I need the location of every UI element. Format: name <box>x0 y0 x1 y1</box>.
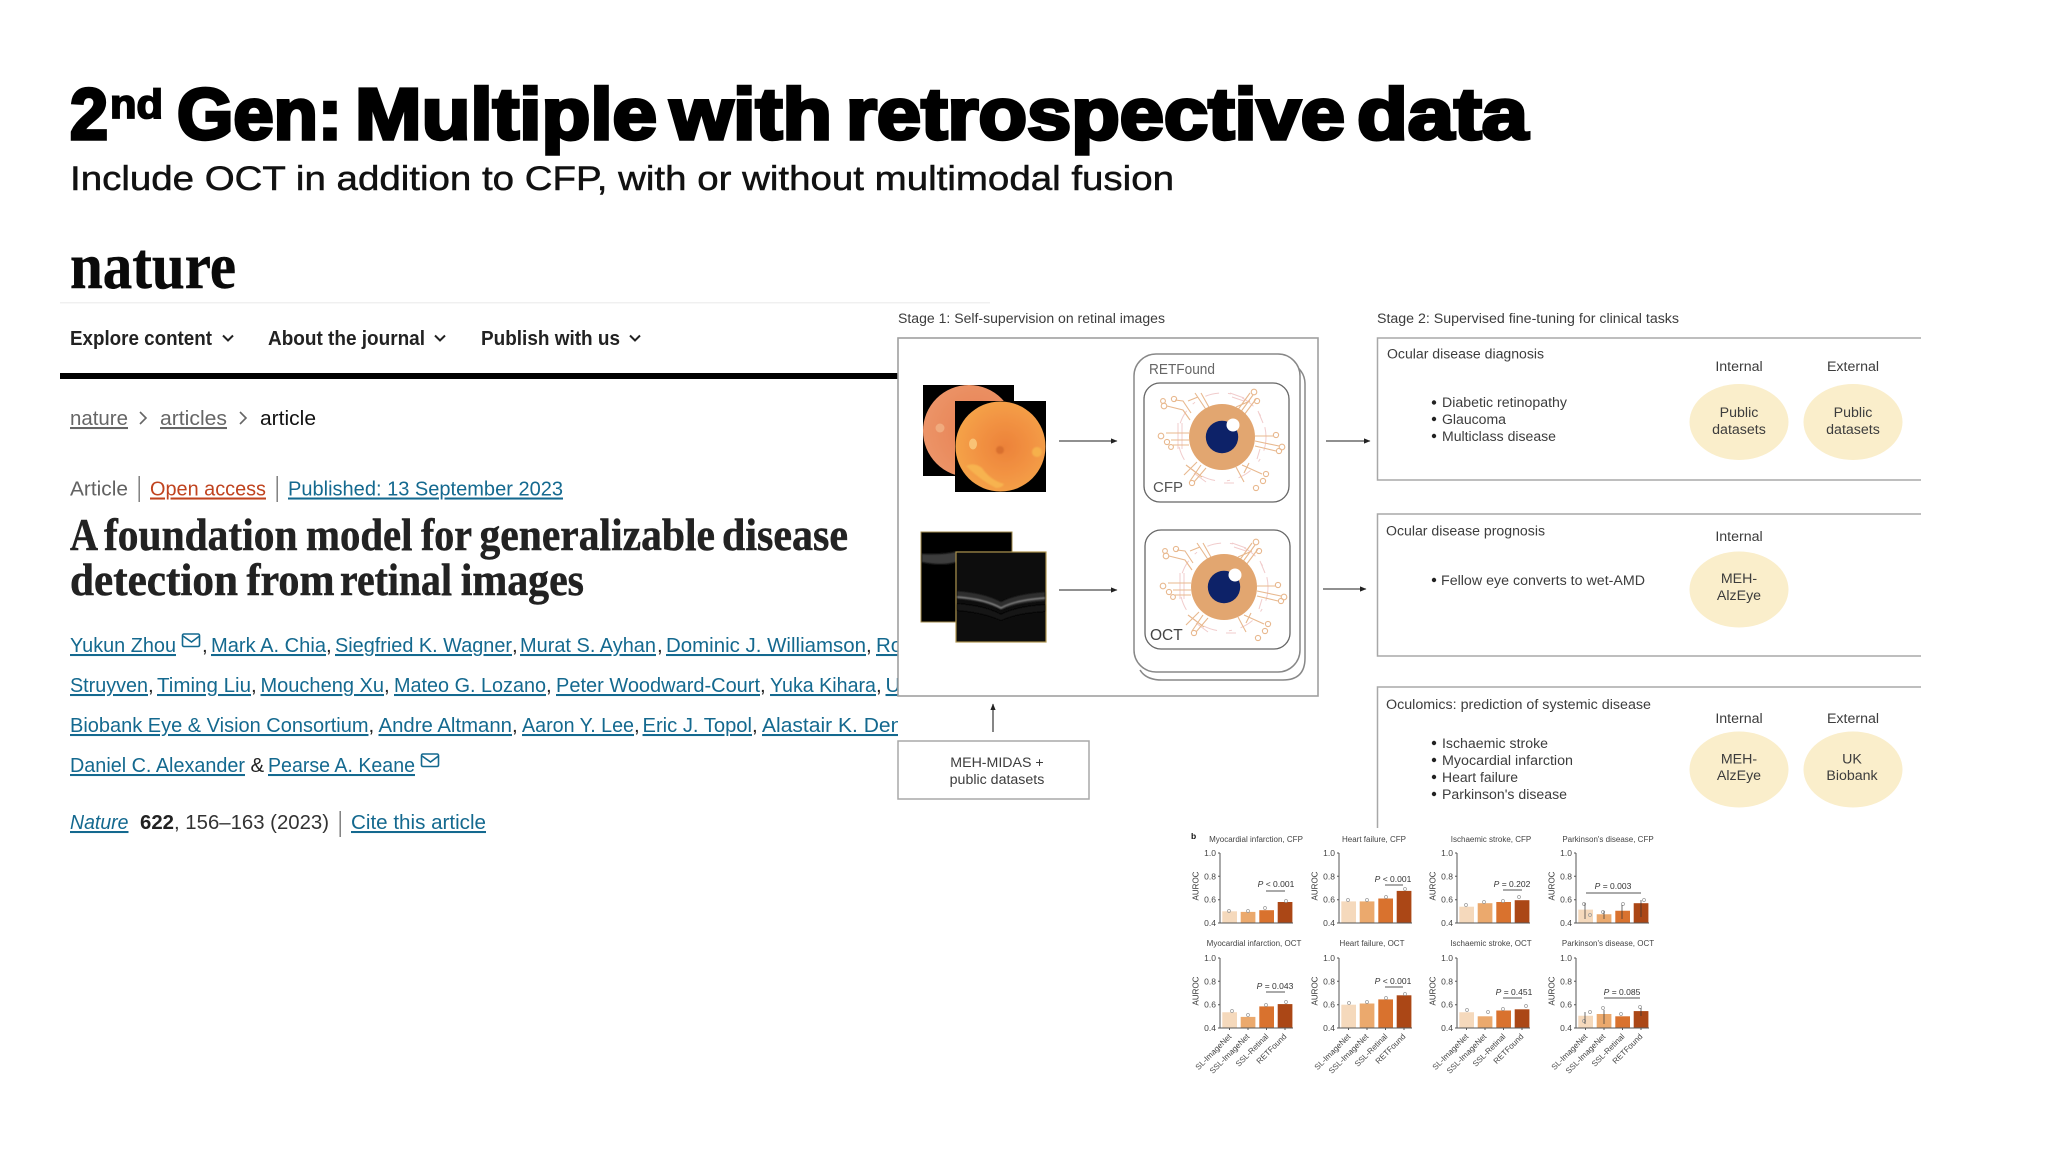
OCT encoder <box>1145 530 1290 649</box>
author list: Peter Woodward-Court <box>556 674 760 697</box>
RETFound model stack: RETFound <box>1149 361 1215 378</box>
chart: ischaemic stroke CFP: Ischaemic stroke, CFP <box>1451 835 1531 844</box>
panel letter: b <box>1191 831 1196 841</box>
chart: heart failure OCT: SL-ImageNet <box>1313 1032 1353 1072</box>
CFP encoder <box>1144 383 1289 502</box>
chart: Parkinson's disease CFP: 0.4 <box>1560 918 1572 928</box>
author list: Pearse A. Keane <box>268 754 415 777</box>
author list: , <box>760 674 766 697</box>
panel: oculomics: Myocardial infarction <box>1442 753 1573 769</box>
panel: ocular disease diagnosis: datasets <box>1712 422 1766 438</box>
nature logo: nature <box>70 230 236 303</box>
chart: myocardial infarction OCT: 0.8 <box>1204 976 1216 986</box>
panel: oculomics: Heart failure <box>1442 770 1518 786</box>
chart: myocardial infarction OCT: 0.4 <box>1204 1023 1216 1033</box>
chart: Parkinson's disease OCT: 0.8 <box>1560 976 1572 986</box>
author list: Daniel C. Alexander <box>70 754 245 777</box>
navigation bar: About the journal <box>268 327 425 350</box>
chart: heart failure OCT: 0.6 <box>1323 1000 1335 1010</box>
chart: ischaemic stroke OCT: P = 0.451 <box>1496 987 1533 997</box>
author list: , <box>546 674 552 697</box>
chart: ischaemic stroke OCT: AUROC <box>1428 976 1438 1005</box>
author list: Siegfried K. Wagner <box>335 634 512 657</box>
title: Gen: <box>177 75 342 155</box>
author list: Mark A. Chia <box>211 634 327 657</box>
dataset box: MEH-MIDAS: public datasets <box>950 772 1044 788</box>
chart: heart failure CFP: AUROC <box>1310 871 1320 900</box>
citation line: Cite this article <box>351 811 486 834</box>
article heading <box>70 510 848 605</box>
chart: myocardial infarction OCT: SL-ImageNet <box>1194 1032 1234 1072</box>
chart: myocardial infarction CFP: 0.6 <box>1204 895 1216 905</box>
chart: heart failure CFP: 1.0 <box>1323 848 1335 858</box>
citation line: Nature <box>70 811 128 834</box>
author list: Struyven <box>70 674 148 697</box>
breadcrumb <box>70 407 316 430</box>
panel: oculomics: UK <box>1842 752 1862 768</box>
chart: ischaemic stroke CFP <box>1428 835 1531 928</box>
author list: Yuka Kihara <box>770 674 877 697</box>
image stack: OCT scans <box>921 532 1046 642</box>
chart: heart failure CFP: 0.4 <box>1323 918 1335 928</box>
chart: ischaemic stroke CFP: 0.4 <box>1441 918 1453 928</box>
author list: Alastair K. Denn <box>762 714 914 737</box>
chart: myocardial infarction OCT <box>1192 939 1301 1076</box>
panel: oculomics: Parkinson's disease <box>1442 787 1567 803</box>
chart: ischaemic stroke OCT: SL-ImageNet <box>1431 1032 1471 1072</box>
chart: Parkinson's disease OCT: Parkinson's disease, OCT <box>1562 939 1654 948</box>
chart: heart failure OCT: SSL-Retinal <box>1353 1032 1390 1069</box>
chart: Parkinson's disease OCT: SSL-Retinal <box>1590 1032 1627 1069</box>
panel: ocular disease prognosis: Internal <box>1715 529 1763 545</box>
article meta row: Published: 13 September 2023 <box>288 478 563 500</box>
chart: Parkinson's disease OCT: 0.6 <box>1560 1000 1572 1010</box>
citation line <box>70 811 486 837</box>
author list: , <box>512 634 518 657</box>
navigation bar: Explore content <box>70 327 212 350</box>
panel: oculomics: Ischaemic stroke <box>1442 736 1548 752</box>
chart: Parkinson's disease OCT: P = 0.085 <box>1604 987 1641 997</box>
breadcrumb: nature <box>70 407 128 430</box>
panel: ocular disease diagnosis: Internal <box>1715 359 1763 375</box>
author list <box>70 634 914 777</box>
arrow: OCT to encoder <box>1059 589 1117 591</box>
chart: myocardial infarction CFP: 0.4 <box>1204 918 1216 928</box>
chart: ischaemic stroke OCT: 0.6 <box>1441 1000 1453 1010</box>
stage 1 heading: Stage 1: Self-supervision on retinal images <box>898 311 1165 327</box>
article heading: foundation <box>104 510 298 560</box>
breadcrumb: articles <box>160 407 227 430</box>
article heading: generalizable <box>480 510 715 560</box>
title: retrospective <box>846 75 1345 155</box>
chart: myocardial infarction CFP: Myocardial infarction, CFP <box>1209 835 1303 844</box>
panel: oculomics <box>1378 687 1921 828</box>
panel: oculomics: External <box>1827 711 1879 727</box>
chart: Parkinson's disease OCT <box>1548 939 1654 1076</box>
article heading: model <box>306 510 412 560</box>
article heading: retinal <box>340 555 452 605</box>
chart: heart failure OCT: 1.0 <box>1323 953 1335 963</box>
chart: ischaemic stroke OCT: Ischaemic stroke, OCT <box>1450 939 1532 948</box>
author list: Yukun Zhou <box>70 634 176 657</box>
chart: heart failure CFP: Heart failure, CFP <box>1342 835 1406 844</box>
chart: Parkinson's disease CFP: AUROC <box>1548 871 1556 900</box>
chart: myocardial infarction CFP: P < 0.001 <box>1258 879 1295 889</box>
author list: , <box>148 674 154 697</box>
chart: heart failure OCT: 0.8 <box>1323 976 1335 986</box>
chart: myocardial infarction OCT: AUROC <box>1192 976 1200 1005</box>
author list: Mateo G. Lozano <box>394 674 546 697</box>
dataset box: MEH-MIDAS <box>898 741 1089 799</box>
panel: ocular disease diagnosis: Ocular disease diagnosis <box>1387 346 1544 362</box>
arrow: stage 1 to diagnosis <box>1326 440 1370 442</box>
author list: Eric J. Topol <box>642 714 752 737</box>
nav rule <box>60 373 898 379</box>
chart: ischaemic stroke OCT: 1.0 <box>1441 953 1453 963</box>
citation line: 622 <box>140 811 174 834</box>
panel: oculomics: Internal <box>1715 711 1763 727</box>
chart: Parkinson's disease OCT: SL-ImageNet <box>1550 1032 1590 1072</box>
RETFound model stack <box>1134 354 1305 680</box>
chart: ischaemic stroke OCT: RETFound <box>1492 1032 1525 1066</box>
chart: heart failure OCT: SSL-ImageNet <box>1327 1032 1371 1076</box>
breadcrumb: article <box>260 407 316 430</box>
author list: , <box>752 714 758 737</box>
chart: heart failure CFP <box>1310 835 1412 928</box>
chart: Parkinson's disease OCT: AUROC <box>1548 976 1556 1005</box>
chart: Parkinson's disease CFP: P = 0.003 <box>1595 881 1632 891</box>
author list: U <box>886 674 900 697</box>
panel: oculomics: Oculomics: prediction of systemic disease <box>1386 697 1651 713</box>
title <box>70 75 1529 155</box>
author list: Biobank Eye & Vision Consortium <box>70 714 368 737</box>
chart: heart failure OCT: Heart failure, OCT <box>1340 939 1405 948</box>
panel: ocular disease diagnosis: Diabetic retinopathy <box>1442 395 1568 411</box>
chart: Parkinson's disease OCT: 0.4 <box>1560 1023 1572 1033</box>
article heading: A <box>70 510 98 560</box>
chart: ischaemic stroke OCT: 0.8 <box>1441 976 1453 986</box>
author list: , <box>657 634 663 657</box>
author list: Moucheng Xu <box>260 674 384 697</box>
chart: myocardial infarction OCT: SSL-ImageNet <box>1208 1032 1252 1076</box>
chart: ischaemic stroke CFP: 0.8 <box>1441 871 1453 881</box>
author list: , <box>384 674 390 697</box>
chart: ischaemic stroke OCT <box>1428 939 1533 1076</box>
chart: ischaemic stroke CFP: 1.0 <box>1441 848 1453 858</box>
author list: & <box>250 754 264 777</box>
article heading: detection <box>70 555 238 605</box>
chart: myocardial infarction OCT: P = 0.043 <box>1257 981 1294 991</box>
chart: ischaemic stroke CFP: AUROC <box>1428 871 1438 900</box>
author list: , <box>326 634 332 657</box>
arrow: stage 1 to prognosis <box>1323 588 1366 590</box>
panel: stage 1 self-supervision <box>898 311 1318 696</box>
image stack: colour fundus photographs <box>923 385 1046 492</box>
navigation bar <box>70 327 640 350</box>
chart: myocardial infarction OCT: 1.0 <box>1204 953 1216 963</box>
panel: oculomics: Biobank <box>1826 768 1879 784</box>
chart: ischaemic stroke OCT: 0.4 <box>1441 1023 1453 1033</box>
article heading: for <box>421 510 472 560</box>
panel: ocular disease diagnosis: datasets <box>1826 422 1880 438</box>
panel: ocular disease diagnosis <box>1378 338 1921 480</box>
panel: ocular disease prognosis: Ocular disease prognosis <box>1386 524 1545 540</box>
article meta row: Open access <box>150 478 266 500</box>
panel: ocular disease diagnosis: Public <box>1720 405 1758 421</box>
CFP encoder: CFP <box>1153 479 1183 496</box>
author list: , <box>202 634 208 657</box>
panel: stage 2 supervised fine-tuning <box>1377 311 1921 828</box>
chart: myocardial infarction OCT: RETFound <box>1255 1032 1288 1066</box>
chart: ischaemic stroke OCT: SSL-ImageNet <box>1445 1032 1489 1076</box>
chart: heart failure CFP: 0.8 <box>1323 871 1335 881</box>
chart: myocardial infarction OCT: SSL-Retinal <box>1234 1032 1271 1069</box>
subtitle: Include OCT in addition to CFP, with or without multimodal fusion <box>70 160 1174 198</box>
chart: Parkinson's disease CFP: 0.8 <box>1560 871 1572 881</box>
chart: heart failure OCT: 0.4 <box>1323 1023 1335 1033</box>
title: Multiple <box>355 75 657 155</box>
chart: myocardial infarction OCT: 0.6 <box>1204 1000 1216 1010</box>
chart: ischaemic stroke OCT: SSL-Retinal <box>1471 1032 1508 1069</box>
chart: myocardial infarction OCT: Myocardial infarction, OCT <box>1207 939 1301 948</box>
chart: Parkinson's disease OCT: 1.0 <box>1560 953 1572 963</box>
chart: heart failure OCT <box>1310 939 1412 1076</box>
chart: Parkinson's disease OCT: SSL-ImageNet <box>1564 1032 1608 1076</box>
title: 2 <box>70 75 108 155</box>
panel: ocular disease diagnosis: Multiclass disease <box>1442 429 1556 445</box>
article heading: from <box>246 555 334 605</box>
article meta row: Article <box>70 478 128 500</box>
navigation bar: Publish with us <box>481 327 620 350</box>
author list: Murat S. Ayhan <box>520 634 656 657</box>
panel: ocular disease prognosis: Fellow eye converts to wet-AMD <box>1441 573 1645 589</box>
chart: ischaemic stroke CFP: 0.6 <box>1441 895 1453 905</box>
panel: ocular disease prognosis: MEH- <box>1721 571 1757 587</box>
panel: AUROC bar charts <box>1191 831 1654 1076</box>
chart: heart failure OCT: AUROC <box>1310 976 1320 1005</box>
author list: , <box>876 674 882 697</box>
article heading: disease <box>722 510 848 560</box>
chart: Parkinson's disease CFP: 0.6 <box>1560 895 1572 905</box>
chart: Parkinson's disease CFP: Parkinson's disease, CFP <box>1562 835 1654 844</box>
chart: myocardial infarction CFP: 1.0 <box>1204 848 1216 858</box>
title: with <box>669 75 832 155</box>
author list: Timing Liu <box>157 674 251 697</box>
panel: oculomics: AlzEye <box>1717 768 1761 784</box>
author list: Dominic J. Williamson <box>666 634 866 657</box>
title: nd <box>110 81 163 127</box>
chart: Parkinson's disease CFP <box>1548 835 1654 928</box>
arrow: datasets to stage 1 <box>992 704 994 732</box>
chart: heart failure OCT: RETFound <box>1374 1032 1407 1066</box>
chart: heart failure OCT: P < 0.001 <box>1375 976 1412 986</box>
panel: ocular disease prognosis: AlzEye <box>1717 588 1761 604</box>
chart: heart failure CFP: 0.6 <box>1323 895 1335 905</box>
author list: Aaron Y. Lee <box>522 714 634 737</box>
author list: , <box>251 674 257 697</box>
author list: Ro <box>876 634 902 657</box>
panel: ocular disease prognosis <box>1378 514 1921 656</box>
panel: ocular disease diagnosis: Glaucoma <box>1442 412 1506 428</box>
author list: , <box>512 714 518 737</box>
author list: Andre Altmann <box>378 714 512 737</box>
arrow: CFP to encoder <box>1059 440 1117 442</box>
panel: ocular disease diagnosis: Public <box>1834 405 1872 421</box>
panel: ocular disease diagnosis: External <box>1827 359 1879 375</box>
stage 1 box <box>898 338 1318 696</box>
chart: heart failure CFP: P < 0.001 <box>1375 874 1412 884</box>
chart: myocardial infarction CFP: AUROC <box>1192 871 1200 900</box>
author list: , <box>634 714 640 737</box>
chart: Parkinson's disease CFP: 1.0 <box>1560 848 1572 858</box>
chart: myocardial infarction CFP: 0.8 <box>1204 871 1216 881</box>
panel: oculomics: MEH- <box>1721 752 1757 768</box>
OCT encoder: OCT <box>1150 627 1183 644</box>
article meta row <box>70 476 563 502</box>
citation line: , 156–163 (2023) <box>174 811 329 834</box>
title: data <box>1357 75 1529 155</box>
chart: ischaemic stroke CFP: P = 0.202 <box>1494 879 1531 889</box>
dataset box: MEH-MIDAS: MEH-MIDAS + <box>950 755 1044 771</box>
article heading: images <box>461 555 584 605</box>
stage 2 heading: Stage 2: Supervised fine-tuning for clinical tasks <box>1377 311 1679 327</box>
author list: , <box>368 714 374 737</box>
author list: , <box>866 634 872 657</box>
chart: myocardial infarction CFP <box>1192 835 1303 928</box>
chart: Parkinson's disease OCT: RETFound <box>1611 1032 1644 1066</box>
